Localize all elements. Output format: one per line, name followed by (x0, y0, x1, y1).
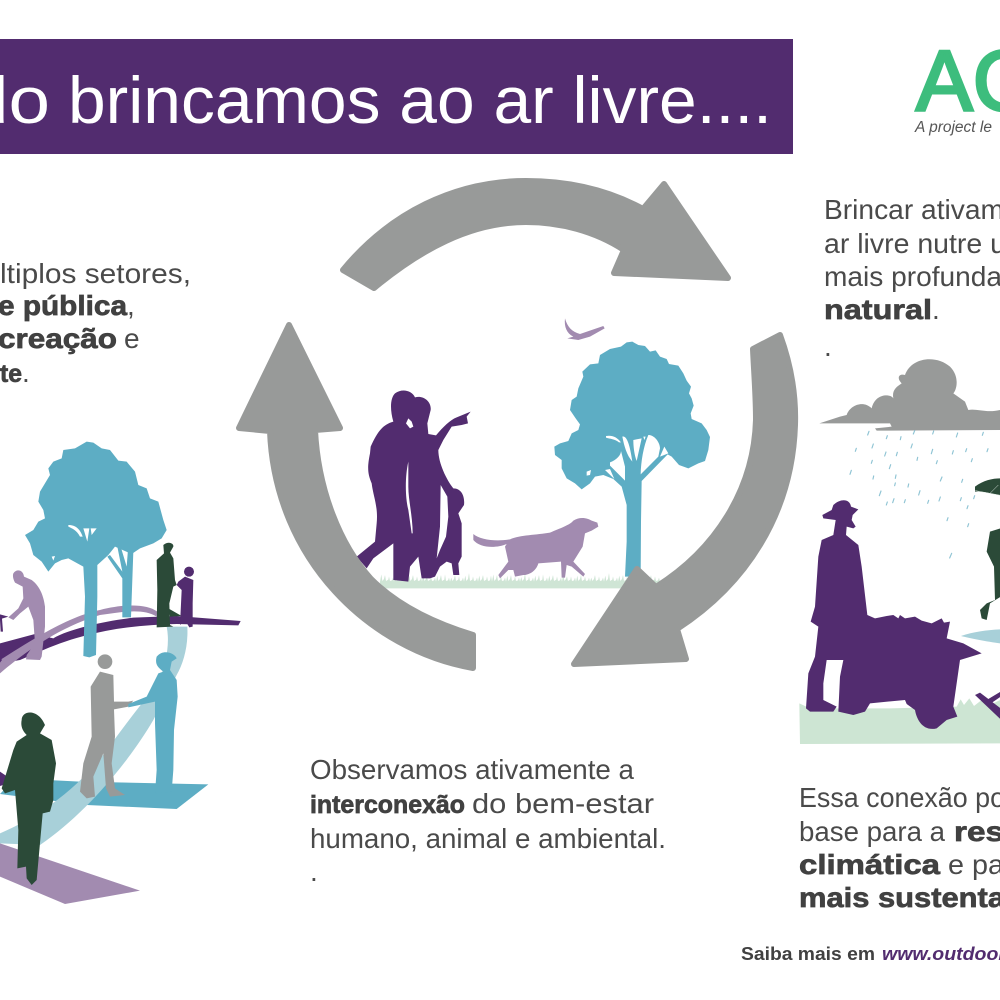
woman with wheelbarrow (806, 500, 982, 729)
text block: left sectors: ltiplos setores, (0, 258, 191, 289)
puddle (961, 629, 1000, 643)
tree (554, 342, 710, 577)
logo: A project le (914, 119, 992, 136)
scene: family, dog and tree (357, 318, 710, 588)
text block: left sectors: e pública (0, 290, 127, 321)
text block: active play: natural (824, 294, 932, 325)
chair (975, 692, 1000, 719)
scene: rain, wheelbarrow and child (799, 359, 1000, 744)
text block: left sectors: . (22, 357, 30, 388)
text block: climate resilience: base para a (799, 816, 945, 847)
dark purple ribbon (0, 616, 241, 663)
arrow: right (574, 335, 795, 664)
grass (380, 573, 660, 588)
text block: active play: ar livre nutre u (824, 228, 1000, 259)
bird (565, 318, 605, 340)
family silhouettes (357, 390, 471, 582)
jumping child (980, 528, 1000, 620)
dark green woman (0, 712, 56, 885)
text block: interconnection: . (310, 856, 318, 887)
dog (473, 518, 598, 578)
text block: active play: . (932, 294, 940, 325)
text block: left sectors: e (124, 323, 140, 354)
text block: active play: . (824, 331, 832, 362)
text block: interconnection: do bem-estar (472, 788, 654, 819)
text block: left sectors: , (127, 290, 135, 321)
teal person handshake (128, 652, 178, 793)
small tree and large tree (25, 442, 167, 657)
text block: climate resilience: res (954, 816, 1000, 847)
arrow: top (343, 181, 728, 288)
lilac ground panel (0, 843, 140, 904)
adult with child on the ribbon (157, 543, 194, 627)
cloud (819, 359, 1000, 431)
footer link: www.outdoor (882, 944, 1000, 964)
pale blue path (0, 627, 187, 845)
rain drops (850, 431, 988, 558)
lilac ribbon (0, 605, 157, 673)
text block: climate resilience: mais sustenta (799, 882, 1000, 913)
umbrella (975, 478, 1000, 495)
grass (799, 698, 1000, 744)
text block: interconnection: Observamos ativamente a (310, 754, 634, 785)
grey person handshake (80, 654, 133, 798)
arrow: left (239, 325, 473, 668)
text block: active play (824, 194, 1000, 362)
title banner: brincamos ao ar livre.... (68, 63, 772, 137)
text block: climate resilience (799, 782, 1000, 913)
stroller fragment (0, 614, 8, 663)
footer link: Saiba mais em (741, 944, 875, 964)
title banner (0, 39, 793, 154)
text block: left sectors: te (0, 360, 22, 388)
text block: interconnection: humano, animal e ambiental. (310, 823, 666, 854)
text block: left sectors (0, 258, 191, 388)
text block: active play: Brincar ativam (824, 194, 1000, 225)
text block: interconnection: interconexão (310, 791, 465, 819)
scene: community and sectors (0, 442, 241, 904)
text block: interconnection (310, 754, 666, 887)
text block: active play: mais profunda (824, 261, 1000, 292)
footer link (741, 944, 1000, 964)
bending person (8, 570, 45, 660)
teal ground panel (0, 778, 208, 809)
text block: left sectors: creação (0, 323, 117, 354)
text block: climate resilience: climática (799, 849, 940, 880)
